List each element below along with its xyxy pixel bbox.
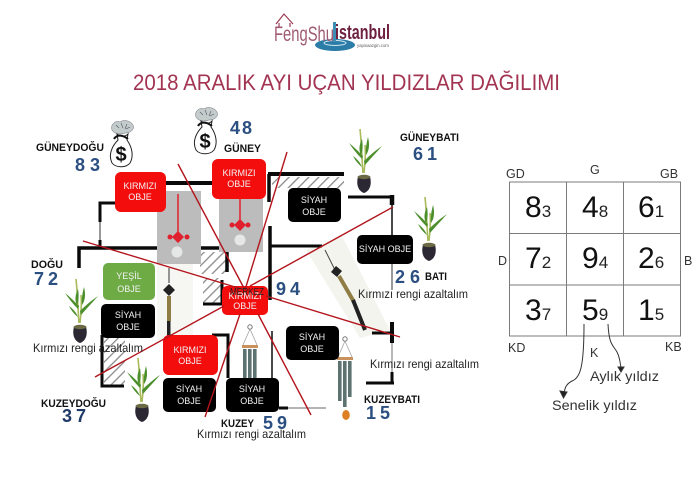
grid numbers: 15 <box>638 294 664 327</box>
grid numbers <box>525 191 664 327</box>
note: west: Kırmızı rengi azaltalım <box>358 287 468 301</box>
box: siyah obje northwest <box>286 326 339 360</box>
box: kırmızı obje center: OBJE <box>233 301 257 311</box>
grid numbers: 72 <box>525 242 551 275</box>
grid lines <box>510 182 680 336</box>
box: kırmızı obje south: OBJE <box>227 179 251 189</box>
icon: money bag southeast <box>110 121 133 167</box>
note: northwest: Kırmızı rengi azaltalım <box>370 357 479 371</box>
grid numbers: 61 <box>638 191 664 224</box>
title: 2018 ARALIK AYI UÇAN YILDIZLAR DAĞILIMI <box>133 70 560 95</box>
grid numbers: 94 <box>582 242 608 275</box>
grid numbers: 37 <box>525 294 551 327</box>
icon: bamboo plant west <box>414 197 447 261</box>
label: senelik yıldız: Senelik yıldız <box>552 398 637 413</box>
direction: doğu: DOĞU <box>31 258 63 271</box>
grid numbers: 26 <box>638 242 664 275</box>
box: yeşil obje: YEŞİL <box>116 271 142 281</box>
direction: güneybatı: 6 1 <box>413 144 437 164</box>
direction: batı <box>395 267 447 287</box>
box: siyah obje southwest: OBJE <box>302 207 326 217</box>
note: north: Kırmızı rengi azaltalım <box>197 427 306 441</box>
box: kırmızı obje northeast <box>163 335 218 375</box>
direction letters: K <box>590 346 599 360</box>
direction: doğu: 7 2 <box>34 269 58 289</box>
box: siyah obje north <box>226 378 279 412</box>
photo: red knot ornament 2 <box>219 199 263 252</box>
box: siyah obje northeast <box>163 378 216 412</box>
icon: black tassel south-west room <box>325 250 365 330</box>
grid numbers: 48 <box>582 191 608 224</box>
icon: money bag south: $ <box>199 131 211 153</box>
box: siyah obje north: SİYAH <box>239 384 265 394</box>
icon: wind chime north-west <box>337 337 353 420</box>
box: siyah obje north: OBJE <box>240 396 264 406</box>
red sector lines <box>83 152 400 417</box>
direction: doğu <box>31 258 63 289</box>
icon: money bag south <box>194 108 217 154</box>
direction: güneybatı <box>400 131 459 164</box>
direction: güney: GÜNEY <box>224 142 262 155</box>
direction: güney <box>224 118 262 155</box>
box: siyah obje northeast: SİYAH <box>176 384 202 394</box>
icon: money bag southeast: $ <box>115 144 127 166</box>
box: yeşil obje <box>103 263 155 300</box>
direction: güneydoğu: GÜNEYDOĞU <box>36 141 104 154</box>
box: siyah obje northeast: OBJE <box>177 396 201 406</box>
walls <box>79 174 394 408</box>
direction: güney: 4 8 <box>230 118 252 138</box>
box: siyah obje southwest: SİYAH <box>301 195 327 205</box>
box: kırmızı obje southeast <box>115 172 166 212</box>
box: kırmızı obje center <box>222 286 268 315</box>
box: kırmızı obje southeast: OBJE <box>128 192 152 202</box>
direction: batı: BATI <box>425 271 447 283</box>
box: siyah obje northwest: OBJE <box>300 344 324 354</box>
logo: istanbul <box>335 22 390 44</box>
direction: kuzey <box>221 413 287 433</box>
hatched wall areas <box>104 177 344 385</box>
grid numbers: 83 <box>525 191 551 224</box>
box: siyah obje northwest: SİYAH <box>299 332 325 342</box>
box: kırmızı obje south <box>212 159 266 199</box>
icon: black tassel west <box>163 268 175 338</box>
direction: kuzeybatı <box>364 394 420 423</box>
direction: güneydoğu <box>36 141 104 175</box>
direction letters: KD <box>508 341 525 355</box>
box: kırmızı obje southeast: KIRMIZI <box>124 181 156 191</box>
direction: güneydoğu: 8 3 <box>75 155 100 175</box>
photo backgrounds <box>157 236 390 340</box>
logo: yapisaazgin.com <box>357 43 389 48</box>
arrow: senelik yıldız <box>560 324 584 398</box>
arrow: aylık yıldız <box>608 324 624 372</box>
box: yeşil obje: OBJE <box>117 284 141 294</box>
panel: floor plan <box>79 152 413 420</box>
box: kırmızı obje south: KIRMIZI <box>222 168 256 178</box>
icon: bamboo plant east <box>65 279 98 343</box>
label: aylık yıldız: Aylık yıldız <box>590 369 659 384</box>
note: east: Kırmızı rengi azaltalım <box>33 341 143 355</box>
box: siyah obje east: SİYAH <box>115 310 141 320</box>
box: siyah obje southwest <box>288 188 341 222</box>
direction: kuzeydoğu: 3 7 <box>62 406 86 426</box>
direction: kuzey: 5 9 <box>263 413 287 433</box>
box: kırmızı obje northeast: KIRMIZI <box>174 345 206 355</box>
label: merkez: MERKEZ <box>230 287 264 298</box>
direction: kuzeybatı: KUZEYBATI <box>364 394 420 406</box>
box: siyah obje east <box>101 304 155 338</box>
panel: flying star grid <box>498 163 692 360</box>
direction letters: KB <box>665 340 682 354</box>
direction: kuzeybatı: 1 5 <box>366 403 390 423</box>
direction letters: G <box>590 163 600 177</box>
icon: wind chime north <box>242 325 258 395</box>
box: siyah obje west <box>357 235 413 264</box>
box: kırmızı obje northeast: OBJE <box>178 356 202 366</box>
box: siyah obje east: OBJE <box>116 322 140 332</box>
logo <box>274 14 390 51</box>
direction letters <box>498 163 692 360</box>
direction letters: GD <box>506 167 525 181</box>
icon: bamboo plant northeast <box>127 358 160 422</box>
logo: FengShu <box>274 23 334 46</box>
box: siyah obje west: SİYAH OBJE <box>359 244 411 254</box>
center number: 9 4 <box>276 279 300 299</box>
direction: kuzey: KUZEY <box>221 418 255 430</box>
direction: batı: 2 6 <box>395 267 420 287</box>
icon: bamboo plant southwest <box>349 129 382 193</box>
direction letters: B <box>684 254 692 268</box>
direction: kuzeydoğu <box>41 397 106 426</box>
photo: red knot ornament 1 <box>157 191 201 264</box>
direction letters: D <box>498 254 507 268</box>
box: kırmızı obje center: KIRMIZI <box>228 291 262 301</box>
direction: güneybatı: GÜNEYBATI <box>400 131 459 144</box>
direction letters: GB <box>660 167 678 181</box>
direction: kuzeydoğu: KUZEYDOĞU <box>41 397 106 410</box>
grid numbers: 59 <box>582 294 608 327</box>
